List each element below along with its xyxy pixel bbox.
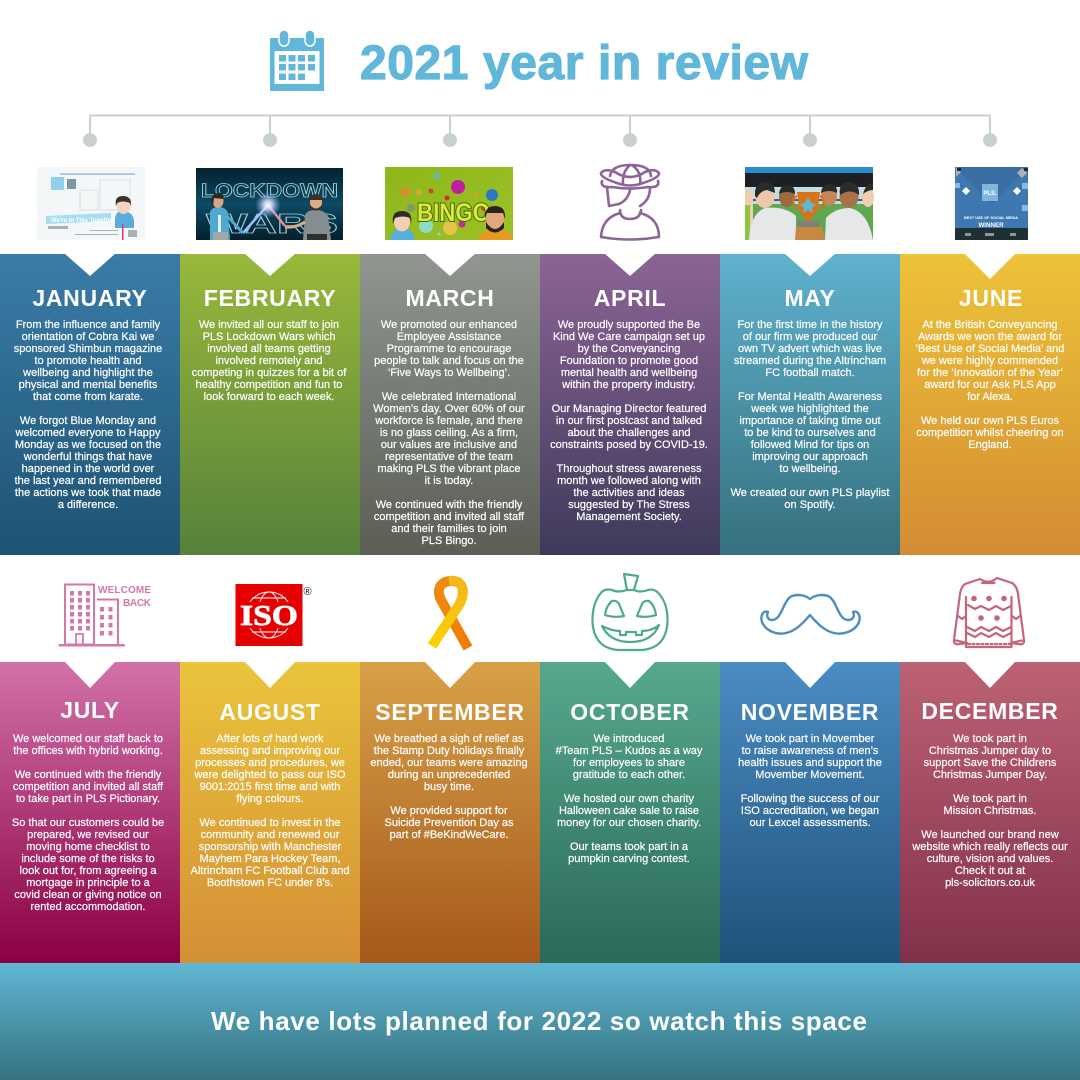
text: May: FC football match. (765, 367, 855, 379)
text: October: Halloween cake sale to raise (559, 805, 699, 817)
text: March: Employee Assistance (397, 331, 501, 343)
text: February: involved remotely and (215, 355, 322, 367)
text: November: ISO accreditation, we began (741, 805, 879, 817)
text: September: We provided support for (390, 805, 508, 817)
text: August: Mayhem Para Hockey Team, (199, 853, 341, 865)
text: September: during an unprecedented (388, 769, 510, 781)
text: October: We hosted our own charity (564, 793, 694, 805)
panel: February (180, 254, 360, 555)
text: June: we were highly commended (922, 355, 1058, 367)
text: January: sponsored Shimbun magazine (14, 343, 162, 355)
text: September: ended, our teams were amazing (370, 757, 528, 769)
image: January poster: We're In This Together (51, 218, 116, 224)
text: November: Following the success of our (741, 793, 879, 805)
text: January: We forgot Blue Monday and (20, 415, 156, 427)
text: May: improving our approach (752, 451, 868, 463)
text: June: for Alexa. (967, 391, 1013, 403)
text: April: month we followed along with (557, 475, 701, 487)
text: April: Management Society. (576, 511, 682, 523)
text: April: in our first postcast and talked (556, 415, 702, 427)
text: July: We welcomed our staff back to (13, 733, 163, 745)
text: March: is no glass ceiling. As a firm, (380, 427, 518, 439)
arrow: October pointer (604, 661, 656, 688)
text: October: gratitude to each other. (573, 769, 685, 781)
panel: March (360, 254, 540, 555)
text: December: website which really reflects our (912, 841, 1068, 853)
text: August: After lots of hard work (216, 733, 324, 745)
text: March: competition and invited all staff (374, 511, 524, 523)
text: February: look forward to each week. (204, 391, 334, 403)
text: September: busy time. (424, 781, 474, 793)
text: May: followed Mind for tips on (751, 439, 869, 451)
image: football team with trophy (745, 167, 874, 240)
image: award winner badge: PLS. (983, 191, 997, 197)
text: December: pls-solicitors.co.uk (945, 877, 1035, 889)
text: August: sponsorship with Manchester (199, 841, 341, 853)
text: October: Our teams took part in a (570, 841, 688, 853)
heading: October: OCTOBER (570, 699, 690, 725)
text: July: moving home checklist to (26, 841, 150, 853)
heading: April: APRIL (594, 285, 666, 311)
text: July: So that our customers could be (12, 817, 164, 829)
text: November: We took part in Movember (746, 733, 874, 745)
text: December: Christmas Jumper Day. (933, 769, 1047, 781)
panel: January (0, 254, 180, 555)
text: February: competing in quizzes for a bit of (192, 367, 346, 379)
panel: August (180, 662, 360, 963)
text: September: part of #BeKindWeCare. (389, 829, 509, 841)
text: April: Kind We Care campaign set up (553, 331, 705, 343)
text: October: for employees to share (573, 757, 685, 769)
text: May: streamed during the Altrincham (734, 355, 886, 367)
image: Bingo: BINGO (417, 199, 490, 227)
heading: November: NOVEMBER (741, 699, 879, 725)
text: January: wonderful things that have (24, 451, 152, 463)
text: April: by the Conveyancing (578, 343, 680, 355)
panel: September (360, 662, 540, 963)
text: June: England. (968, 439, 1012, 451)
text: January: wellbeing and highlight the (23, 367, 153, 379)
text: April: suggested by The Stress (568, 499, 690, 511)
heading: May: MAY (784, 285, 836, 311)
text: March: Programme to encourage (387, 343, 511, 355)
panel: December (900, 662, 1080, 963)
text: December: support Save the Childrens (924, 757, 1056, 769)
arrow: July pointer (64, 661, 116, 688)
icon: person with halo (601, 165, 659, 240)
text: November: Movember Movement. (755, 769, 865, 781)
text: January: the last year and remembered (15, 475, 161, 487)
text: May: on Spotify. (784, 499, 836, 511)
text: August: Altrincham FC Football Club and (191, 865, 349, 877)
arrow: November pointer (784, 661, 836, 688)
text: December: Check it out at (955, 865, 1025, 877)
text: December: We took part in (953, 793, 1027, 805)
text: March: our values are inclusive and (381, 439, 517, 451)
text: August: community and renewed our (201, 829, 339, 841)
arrow: April pointer (604, 253, 656, 276)
text: July (12, 733, 164, 913)
icon: welcome back building: WELCOME (98, 585, 151, 596)
timeline connector (83, 114, 997, 147)
text: July: look out for, from agreeing a (20, 865, 156, 877)
text: January: the actions we took that made (15, 487, 161, 499)
jumper dots (971, 596, 1007, 621)
image: Lockdown Wars: WARS (206, 208, 338, 239)
text: August: Boothstown FC under 8’s. (207, 877, 333, 889)
text: March: We celebrated International (382, 391, 516, 403)
text: June: for the ‘Innovation of the Year’ (917, 367, 1063, 379)
text: May: to be kind to ourselves and (744, 427, 876, 439)
text: April: within the property industry. (562, 379, 696, 391)
text: December (912, 733, 1068, 889)
text: June: competition whilst cheering on (916, 427, 1064, 439)
arrow: March pointer (424, 253, 476, 276)
panel: June (900, 254, 1080, 555)
text: August (190, 733, 349, 889)
text: July: competition and invited all staff (13, 781, 163, 793)
text: December: Christmas Jumper day to (929, 745, 1051, 757)
text: February (192, 319, 346, 403)
text: July: to take part in PLS Pictionary. (16, 793, 160, 805)
text: January (14, 319, 162, 511)
image: Bingo (385, 167, 513, 240)
text: April: the activities and ideas (573, 487, 685, 499)
text: July: We continued with the friendly (15, 769, 161, 781)
text: May: For the first time in the history (738, 319, 882, 331)
text: June: At the British Conveyancing (922, 319, 1058, 331)
text: November: our Lexcel assessments. (749, 817, 871, 829)
text: May: importance of taking time out (739, 415, 881, 427)
arrow: February pointer (244, 253, 296, 276)
icon: christmas jumper (954, 578, 1024, 647)
text: March: Women’s day. Over 60% of our (373, 403, 525, 415)
panel: November (720, 662, 900, 963)
text: March: making PLS the vibrant place (377, 463, 521, 475)
icon: welcome back building (58, 584, 152, 646)
text: December: We took part in (953, 733, 1027, 745)
text: June: Awards we won the award for (918, 331, 1062, 343)
text: October: #Team PLS – Kudos as a way (556, 745, 702, 757)
text: September: Suicide Prevention Day as (384, 817, 514, 829)
arrow: December pointer (964, 661, 1016, 688)
heading: July: JULY (60, 697, 120, 723)
text: January: From the influence and family (16, 319, 160, 331)
text: June (916, 319, 1064, 451)
text: May: to wellbeing. (779, 463, 841, 475)
text: August: processes and procedures, we (195, 757, 345, 769)
text: September: the Stamp Duty holidays finally (374, 745, 524, 757)
text: May: week we highlighted the (751, 403, 869, 415)
text: June: ‘Best Use of Social Media’ and (916, 343, 1064, 355)
text: September: We breathed a sigh of relief as (374, 733, 524, 745)
text: March: people to talk and focus on the (374, 355, 524, 367)
text: April: We proudly supported the Be (558, 319, 700, 331)
heading: March: MARCH (405, 285, 495, 311)
text: July: prepared, we revised our (27, 829, 149, 841)
text: March: it is today. (425, 475, 473, 487)
text: February: involved all teams getting (207, 343, 331, 355)
text: February: We invited all our staff to join (199, 319, 339, 331)
text: May (730, 319, 890, 511)
text: January: physical and mental benefits (19, 379, 157, 391)
text: January: Monday as we focused on the (15, 439, 161, 451)
heading: December: DECEMBER (921, 698, 1059, 724)
text: April: Our Managing Director featured (552, 403, 706, 415)
text: November (738, 733, 882, 829)
text: July: rented accommodation. (31, 901, 145, 913)
text: May: own TV advert which was live (738, 343, 882, 355)
text: April (550, 319, 708, 523)
text: January: happened in the world over (22, 463, 154, 475)
text: January: that come from karate. (33, 391, 143, 403)
text: October: pumpkin carving contest. (568, 853, 690, 865)
text: February: healthy competition and fun to (196, 379, 342, 391)
text: January: a difference. (58, 499, 118, 511)
icon: calendar (270, 30, 324, 91)
icon: moustache (761, 595, 860, 634)
text: March: PLS Bingo. (421, 535, 477, 547)
panel: May (720, 254, 900, 555)
icon: welcome back building: BACK (123, 598, 152, 609)
arrow: September pointer (424, 661, 476, 688)
text: September (370, 733, 528, 841)
text: April: mental health and wellbeing (561, 367, 697, 379)
text: June: We held our own PLS Euros (921, 415, 1059, 427)
heading: February: FEBRUARY (204, 285, 336, 311)
text: April: constraints posed by COVID-19. (550, 439, 708, 451)
arrow: May pointer (784, 253, 836, 276)
text: August: flying colours. (236, 793, 304, 805)
arrow: June pointer (964, 253, 1016, 279)
text: April: Throughout stress awareness (557, 463, 701, 475)
image: January poster (37, 167, 145, 240)
text: July: include some of the risks to (21, 853, 155, 865)
text: May: For Mental Health Awareness (738, 391, 882, 403)
text: October: We introduced (594, 733, 664, 745)
text: November: to raise awareness of men’s (742, 745, 878, 757)
text: January: welcomed everyone to Happy (16, 427, 160, 439)
image: award winner badge: BEST USE OF SOCIAL MEDIA (964, 216, 1018, 220)
text: October (556, 733, 702, 865)
arrow: January pointer (64, 253, 116, 276)
text: August: were delighted to pass our ISO (194, 769, 346, 781)
text: June: award for our Ask PLS App (924, 379, 1056, 391)
text: January: orientation of Cobra Kai we (22, 331, 154, 343)
text: July: covid clean or giving notice on (14, 889, 162, 901)
text: August: assessing and improving our (200, 745, 340, 757)
heading: June: JUNE (959, 285, 1023, 311)
footer text: We have lots planned for 2022 so watch this space (211, 1006, 867, 1036)
heading: January: JANUARY (32, 285, 148, 311)
text: May: of our firm we produced our (743, 331, 877, 343)
text: March: representative of the team (385, 451, 513, 463)
icon: awareness ribbon (432, 581, 468, 648)
panel: October (540, 662, 720, 963)
image: award winner badge (955, 167, 1028, 240)
text: December: culture, vision and values. (927, 853, 1053, 865)
image: Lockdown Wars: LOCKDOWN (201, 181, 338, 202)
text: March: We continued with the friendly (376, 499, 522, 511)
panel: July (0, 662, 180, 963)
text: April: Foundation to promote good (560, 355, 698, 367)
text: March: ‘Five Ways to Wellbeing’. (388, 367, 510, 379)
icon: pumpkin (592, 574, 668, 650)
text: March (373, 319, 525, 547)
image: award winner badge: WINNER (978, 222, 1004, 229)
arrow: August pointer (244, 661, 296, 688)
text: March: We promoted our enhanced (381, 319, 517, 331)
footer banner (0, 963, 1080, 1080)
title: 2021 year in review (360, 37, 809, 90)
text: December: We launched our brand new (921, 829, 1059, 841)
panel: April (540, 254, 720, 555)
text: August: 9001:2015 first time and with (200, 781, 340, 793)
text: July: the offices with hybrid working. (13, 745, 163, 757)
image: Lockdown Wars (196, 168, 343, 240)
text: March: and their families to join (391, 523, 507, 535)
text: May: We created our own PLS playlist (731, 487, 889, 499)
icon: ISO logo: ® (304, 586, 312, 598)
heading: September: SEPTEMBER (375, 699, 525, 725)
text: February: PLS Lockdown Wars which (203, 331, 335, 343)
text: March: workforce is female, and there (375, 415, 523, 427)
text: April: about the challenges and (568, 427, 690, 439)
text: November: health issues and support the (738, 757, 882, 769)
text: July: mortgage in principle to a (26, 877, 150, 889)
icon: ISO logo: ISO (240, 600, 298, 632)
text: January: to promote health and (34, 355, 142, 367)
heading: August: AUGUST (219, 699, 321, 725)
text: December: Mission Christmas. (944, 805, 1036, 817)
icon: ISO logo (236, 584, 312, 646)
text: August: We continued to invest in the (199, 817, 341, 829)
text: October: money for our chosen charity. (557, 817, 701, 829)
